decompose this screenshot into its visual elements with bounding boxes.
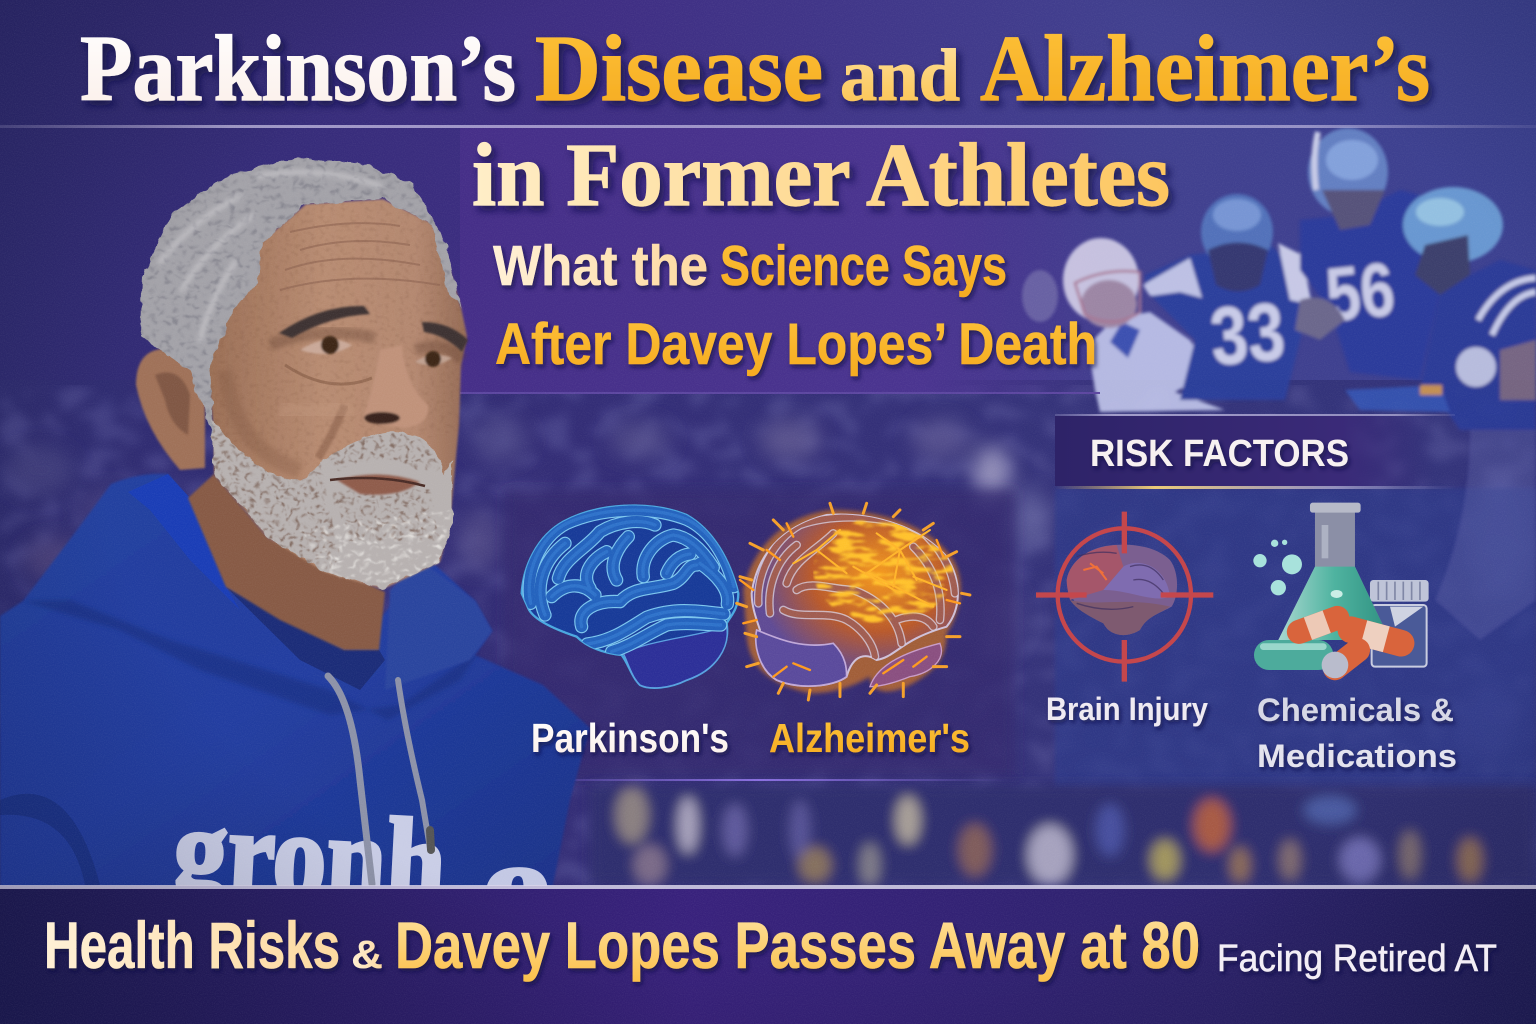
hood inner and shading [0,474,492,885]
title background panel [460,128,1120,394]
title line 1: Parkinson’s [80,17,516,121]
face shading and wrinkles [225,223,462,470]
Parkinson's label: Parkinson's [531,715,729,761]
subtitle line 2: After Davey Lopes’ Death [495,312,1097,377]
player: number 33: 33 [1207,286,1288,383]
player: white jersey: 9 [1193,337,1209,368]
hair highlights [160,172,380,340]
nose [362,345,428,428]
subtitle line 1: Science Says [720,234,1007,298]
mouth line [330,478,425,486]
football players photo [1022,128,1536,640]
blue Parkinson's brain [522,506,738,688]
cerebellum [870,643,941,687]
player: white jersey [1063,238,1225,412]
lower crowd strip [590,785,1536,887]
cerebellum [623,627,727,688]
Medications label line: Medications [1257,738,1457,774]
man in blue hoodie [0,157,590,951]
gyri [758,517,955,657]
divider lines [0,125,1536,781]
hoodie drawstrings [328,676,431,884]
player: number 56 [1295,128,1440,380]
Brain Injury label: Brain Injury [1046,691,1208,727]
title line 2: in Former Athletes [472,126,1170,225]
bottom headline: Health Risks [44,908,340,982]
bottom headline: Facing Retired AT [1217,938,1497,980]
subtitle line 1: What the [493,234,708,298]
neck [188,474,385,650]
icon: chemicals and medications [1253,503,1429,685]
blurred stadium crowd [0,385,1536,885]
lower lobe [756,630,847,686]
ear inner shadow [155,372,190,435]
title line 1: Alzheimer’s [980,17,1430,121]
bottom headline: Davey Lopes Passes Away at 80 [395,908,1200,982]
icon: brain injury target [1036,512,1213,682]
Chemicals label line: Chemicals & [1257,692,1454,728]
risk factors panel [1055,488,1536,788]
jar [1370,580,1429,667]
mouth [337,474,420,495]
Alzheimer's label: Alzheimer's [769,715,970,761]
hair [140,157,461,440]
ear [136,349,205,470]
flask [1278,503,1390,640]
title line 1: and [840,35,960,117]
grey beard [212,420,452,589]
hoodie lettering partial: e [482,818,550,951]
flames [737,503,970,700]
player: number 56: 56 [1322,247,1399,338]
dark brain panel [505,490,1015,778]
eyebrows [279,306,468,352]
gyri [529,510,734,652]
crosshair [1036,512,1213,682]
glowing Alzheimer's brain [737,503,970,700]
bottom band [0,885,1536,1024]
subtitle line 1 [493,234,1007,298]
blurred player at far left [1022,270,1058,322]
hoodie body [0,474,590,890]
bubbles [1253,540,1302,595]
title line 1: Disease [535,17,823,121]
player legs and gloves [1345,385,1536,640]
bottom headline [44,908,1497,982]
player: number 33 [1143,194,1312,400]
title line 1 [80,17,1430,121]
hoodie lettering: gronh [171,782,449,931]
skin texture [262,206,464,454]
bottom headline: & [351,933,383,977]
eyes [300,336,452,367]
brain body [752,515,958,686]
risk factors heading: RISK FACTORS [1090,433,1349,475]
capsules [1254,603,1417,685]
injured brain [1067,545,1177,635]
risk factors heading [1055,414,1455,489]
player: right, striped sleeve [1403,187,1536,430]
face [207,199,467,589]
outer flame glow [743,510,961,693]
